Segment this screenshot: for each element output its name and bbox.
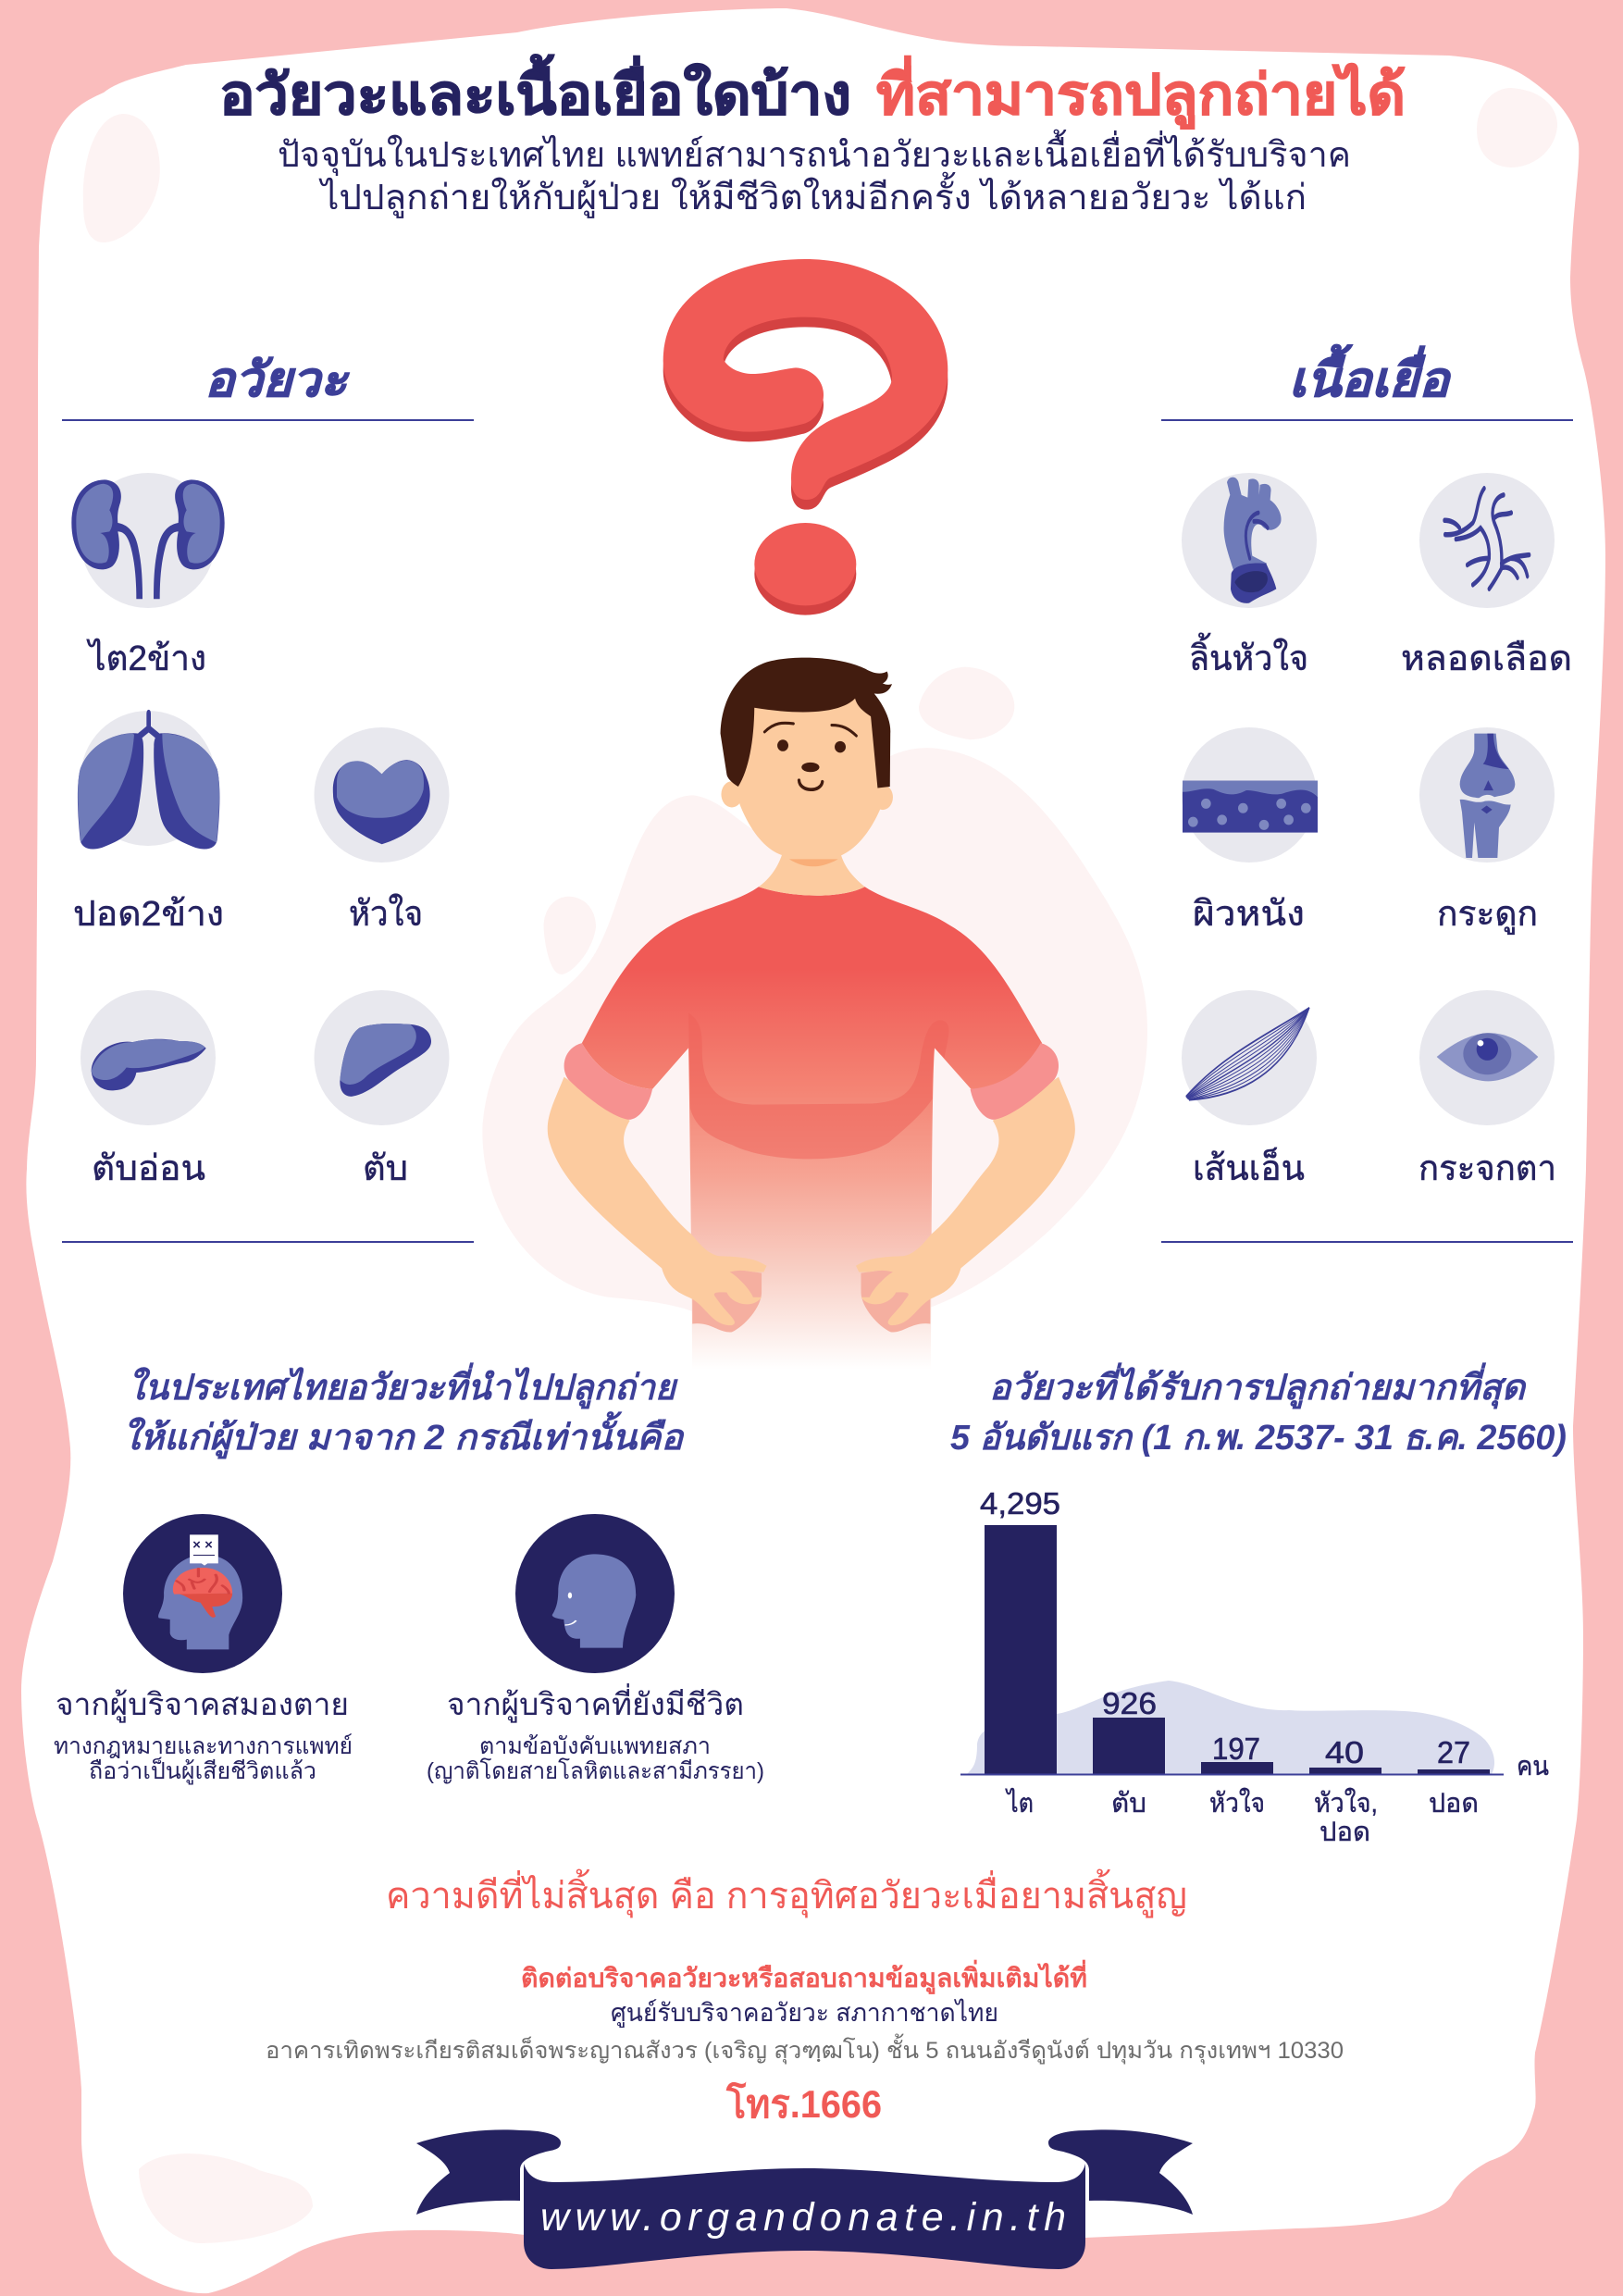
- text: living donor: [427, 1683, 764, 1784]
- icon: pancreas: [92, 1039, 206, 1090]
- heading: tissues: เนื้อเยื่อ: [1289, 344, 1452, 407]
- bar chart: ไต: [1005, 1787, 1034, 1818]
- text: living donor: ตามข้อบังคับแพทยสภา: [479, 1733, 711, 1759]
- icon: question mark: [663, 259, 948, 615]
- label: blood vessels: หลอดเลือด: [1401, 639, 1572, 678]
- panel: tissues: [1182, 473, 1572, 1188]
- contact block: [266, 1959, 1344, 2065]
- heading: two donor cases: ในประเทศไทยอวัยวะที่นำไปปลูกถ่าย: [128, 1362, 679, 1409]
- panel: organs: [71, 473, 450, 1188]
- icon: cornea: [1437, 1033, 1538, 1081]
- bar chart: [960, 1486, 1549, 1847]
- subtitle: ไปปลูกถ่ายให้กับผู้ป่วย ให้มีชีวิตใหม่อีกครั้ง ได้หลายอวัยวะ ได้แก่: [318, 171, 1307, 218]
- text: brain dead donor: ถือว่าเป็นผู้เสียชีวิตแล้ว: [89, 1756, 316, 1785]
- icon: tendon: [1186, 1008, 1309, 1100]
- icon: living donor: [515, 1514, 675, 1673]
- shirt and torso: [582, 887, 1042, 1370]
- ribbon banner: [416, 2129, 1193, 2269]
- heading: top five organs: อวัยวะที่ได้รับการปลูกถ่ายมากที่สุด: [989, 1362, 1527, 1409]
- contact block: อาคารเทิดพระเกียรติสมเด็จพระญาณสังวร (เจริญ สุวฑฺฒโน) ชั้น 5 ถนนอังรีดูนังต์ ปทุมวัน กรุงเทพฯ 10330: [266, 2033, 1344, 2065]
- bar chart: 197: [1212, 1731, 1260, 1766]
- label: skin: ผิวหนัง: [1193, 895, 1305, 934]
- icon: brain dead donor: × ×: [192, 1537, 213, 1553]
- phone number: โทร.1666: [725, 2081, 882, 2126]
- heading: two donor cases: [122, 1362, 685, 1459]
- subtitle: [278, 129, 1351, 218]
- icon: lungs: [78, 714, 219, 850]
- icon: kidneys: [71, 479, 225, 599]
- icon: blood vessels: [1444, 489, 1530, 589]
- icon: bone: [1460, 734, 1515, 858]
- heading: top five organs: 5 อันดับแรก (1 ก.พ. 2537- 31 ธ.ค. 2560): [950, 1419, 1567, 1458]
- bar chart: หัวใจ: [1209, 1787, 1265, 1818]
- bar chart: 4,295: [980, 1486, 1060, 1520]
- bar chart: คน: [1517, 1752, 1549, 1781]
- heading: two donor cases: ให้แก่ผู้ป่วย มาจาก 2 กรณีเท่านั้นคือ: [122, 1411, 685, 1459]
- bar chart: ปอด: [1429, 1789, 1479, 1818]
- text: brain dead donor: จากผู้บริจาคสมองตาย: [56, 1687, 349, 1723]
- icon: brain dead donor: [123, 1514, 282, 1673]
- label: bone: กระดูก: [1437, 895, 1538, 935]
- contact block: ติดต่อบริจาคอวัยวะหรือสอบถามข้อมูลเพิ่มเติมได้ที่: [521, 1959, 1087, 1994]
- bar chart: 40: [1325, 1735, 1364, 1769]
- neck: [759, 852, 865, 896]
- text: living donor: จากผู้บริจาคที่ยังมีชีวิต: [447, 1683, 744, 1723]
- bar chart: ตับ: [1111, 1789, 1146, 1818]
- text: brain dead donor: ทางกฎหมายและทางการแพทย์: [54, 1733, 353, 1759]
- contact block: ศูนย์รับบริจาคอวัยวะ สภากาชาดไทย: [611, 1998, 998, 2028]
- title: [219, 54, 1406, 130]
- figure: man with background blobs: [482, 658, 1147, 1370]
- label: liver: ตับ: [363, 1149, 408, 1188]
- label: heart valve: ลิ้นหัวใจ: [1189, 632, 1308, 678]
- icon: heart: [333, 760, 430, 844]
- head: [721, 658, 893, 866]
- label: pancreas: ตับอ่อน: [92, 1149, 205, 1188]
- icon: heart valve: [1224, 478, 1282, 603]
- text: brain dead donor: [54, 1687, 353, 1785]
- right arm: [856, 1043, 1075, 1333]
- left arm: [548, 1043, 767, 1333]
- icon: liver: [340, 1024, 431, 1097]
- title: อวัยวะและเนื้อเยื่อใดบ้าง: [219, 54, 851, 126]
- label: tendon: เส้นเอ็น: [1193, 1147, 1305, 1188]
- heading: organs: อวัยวะ: [204, 354, 350, 407]
- text: living donor: (ญาติโดยสายโลหิตและสามีภรรยา): [427, 1757, 764, 1784]
- label: kidneys: ไต2ข้าง: [86, 639, 206, 678]
- bar chart: 926: [1102, 1686, 1157, 1720]
- subtitle: ปัจจุบันในประเทศไทย แพทย์สามารถนำอวัยวะและเนื้อเยื่อที่ได้รับบริจาค: [278, 129, 1351, 176]
- label: cornea: กระจกตา: [1419, 1149, 1556, 1188]
- bar chart: 27: [1437, 1735, 1470, 1769]
- bar chart: ปอด: [1319, 1818, 1370, 1847]
- label: heart: หัวใจ: [349, 894, 423, 934]
- label: lungs: ปอด2ข้าง: [73, 895, 224, 934]
- icon: skin: [1183, 781, 1318, 833]
- slogan: ความดีที่ไม่สิ้นสุด คือ การอุทิศอวัยวะเมื่อยามสิ้นสูญ: [386, 1868, 1187, 1918]
- title: ที่สามารถปลูกถ่ายได้: [876, 56, 1406, 130]
- website: www.organdonate.in.th: [540, 2195, 1066, 2240]
- bar chart: หัวใจ,: [1314, 1787, 1378, 1818]
- heading: top five organs: [950, 1362, 1567, 1458]
